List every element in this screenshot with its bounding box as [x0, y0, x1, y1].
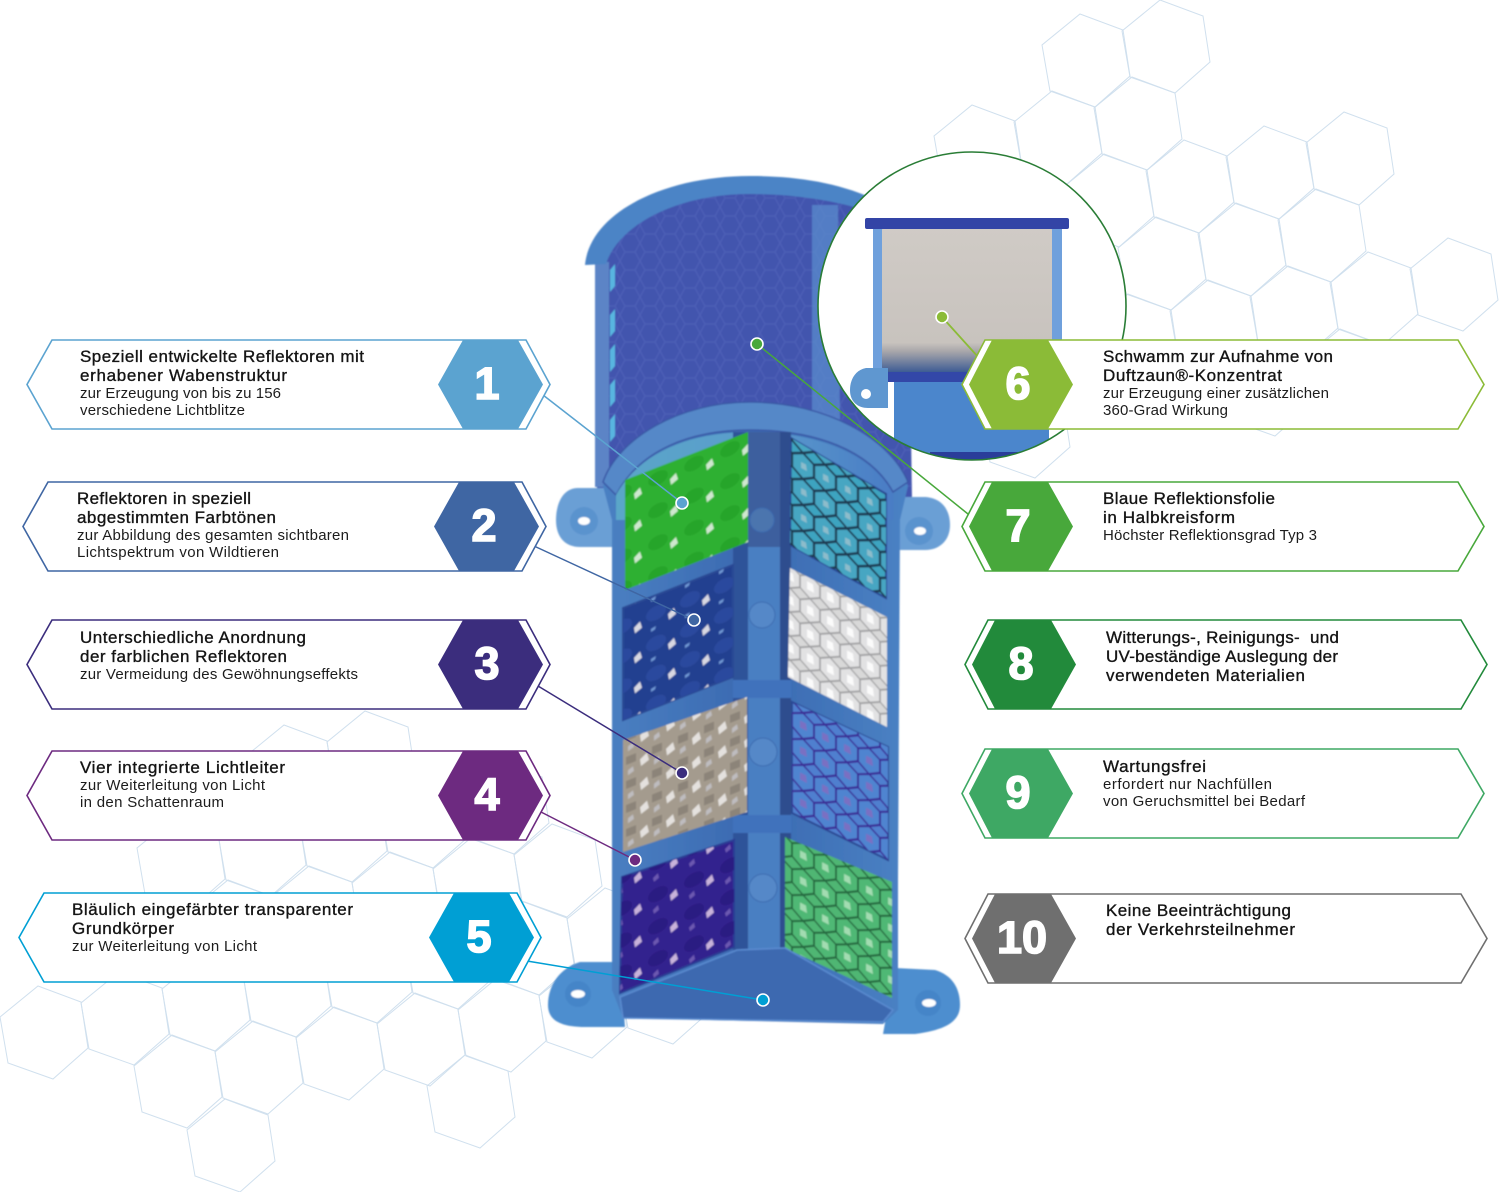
marker dot 5	[757, 994, 769, 1006]
text: erhabener Wabenstruktur	[80, 366, 287, 385]
text: Speziell entwickelte Reflektoren mit	[80, 347, 364, 366]
leader line 7	[757, 344, 968, 514]
text	[1106, 628, 1339, 685]
number: 4	[474, 769, 500, 820]
outline	[965, 894, 1487, 983]
text: Grundkörper	[72, 919, 174, 938]
text: in den Schattenraum	[80, 794, 224, 811]
holder base band	[888, 372, 968, 382]
text: zur Erzeugung von bis zu 156	[80, 385, 281, 402]
text: abgestimmten Farbtönen	[77, 508, 276, 527]
text	[1103, 757, 1306, 810]
outline	[962, 482, 1484, 571]
text: verschiedene Lichtblitze	[80, 402, 245, 419]
callout 4	[27, 751, 550, 840]
badge	[972, 620, 1076, 709]
sponge	[882, 225, 1052, 372]
text: Höchster Reflektionsgrad Typ 3	[1103, 527, 1317, 544]
callout 10	[965, 894, 1487, 983]
badge	[438, 340, 543, 429]
background honeycomb bottom left	[0, 711, 708, 1192]
outline	[27, 751, 550, 840]
number: 10	[997, 912, 1047, 963]
number: 8	[1008, 638, 1034, 689]
text	[1106, 901, 1295, 939]
badge	[434, 482, 539, 571]
inset flange	[850, 368, 888, 408]
callout 2	[23, 482, 546, 571]
outline	[27, 620, 550, 709]
marker dot 2	[688, 614, 700, 626]
reflector violet blue right	[792, 702, 888, 860]
lower mounting flange left	[548, 962, 625, 1027]
marker dot 3	[676, 767, 688, 779]
text	[1103, 489, 1317, 544]
holder body	[873, 226, 1062, 378]
text: Blaue Reflektionsfolie	[1103, 489, 1275, 508]
text: der Verkehrsteilnehmer	[1106, 920, 1295, 939]
badge	[969, 749, 1073, 838]
marker dot 1	[676, 497, 688, 509]
callout 7	[962, 482, 1484, 571]
callout 1	[27, 340, 550, 429]
flange holes upper	[570, 507, 933, 545]
text: zur Abbildung des gesamten sichtbaren	[77, 527, 349, 544]
number: 6	[1005, 358, 1031, 409]
badge	[438, 620, 543, 709]
reflector tan left	[623, 697, 747, 852]
text: zur Weiterleitung von Licht	[72, 938, 258, 955]
leader line 4	[541, 812, 635, 860]
housing dome collar	[603, 402, 908, 495]
central spine	[733, 432, 791, 952]
text: 360-Grad Wirkung	[1103, 402, 1228, 419]
outline	[27, 340, 550, 429]
outline	[23, 482, 546, 571]
text: der farblichen Reflektoren	[80, 647, 287, 666]
text	[80, 758, 285, 811]
leader line 5	[527, 961, 763, 1000]
outline	[19, 893, 541, 982]
outline	[962, 340, 1484, 429]
reflector teal right	[790, 438, 886, 598]
text: Bläulich eingefärbter transparenter	[72, 900, 353, 919]
upper mounting flange left	[556, 488, 613, 547]
reflector silver right	[788, 568, 887, 727]
number: 3	[474, 638, 500, 689]
outline	[965, 620, 1487, 709]
badge	[969, 482, 1073, 571]
holder lower part	[894, 382, 1049, 454]
dome inner	[616, 432, 893, 520]
badge	[969, 340, 1073, 429]
callout 3	[27, 620, 550, 709]
text: UV-beständige Auslegung der	[1106, 647, 1338, 666]
triangular base	[620, 948, 893, 1022]
callout 9	[962, 749, 1484, 838]
reflector green right	[785, 837, 892, 998]
text	[72, 900, 353, 955]
text: Lichtspektrum von Wildtieren	[77, 544, 279, 561]
marker dot 6	[936, 311, 948, 323]
inset bottom strip	[930, 452, 1018, 460]
leader line 1	[543, 395, 682, 503]
leader line 2	[534, 546, 694, 620]
text: Vier integrierte Lichtleiter	[80, 758, 285, 777]
text: zur Erzeugung einer zusätzlichen	[1103, 385, 1329, 402]
text: zur Weiterleitung von Licht	[80, 777, 266, 794]
marker dot 7	[751, 338, 763, 350]
text: zur Vermeidung des Gewöhnungseffekts	[80, 666, 358, 683]
text: Witterungs-, Reinigungs- und	[1106, 628, 1339, 647]
text	[80, 347, 364, 419]
text: Duftzaun®-Konzentrat	[1103, 366, 1282, 385]
marker dot 4	[629, 854, 641, 866]
number: 5	[466, 911, 492, 962]
number: 7	[1005, 500, 1031, 551]
badge	[429, 893, 534, 982]
text: verwendeten Materialien	[1106, 666, 1305, 685]
prism housing	[603, 402, 908, 1024]
lower mounting flange right	[883, 968, 960, 1034]
number: 2	[471, 500, 497, 551]
badge	[972, 894, 1076, 983]
callout 8	[965, 620, 1487, 709]
reflector indigo left	[620, 840, 734, 993]
text: erfordert nur Nachfüllen	[1103, 776, 1272, 793]
text: Keine Beeinträchtigung	[1106, 901, 1291, 920]
inset contents	[850, 218, 1069, 465]
text: in Halbkreisform	[1103, 508, 1235, 527]
inset circle: sponge detail	[818, 152, 1126, 465]
number: 1	[474, 358, 500, 409]
leader line 6	[942, 317, 979, 358]
text: von Geruchsmittel bei Bedarf	[1103, 793, 1306, 810]
text: Schwamm zur Aufnahme von	[1103, 347, 1333, 366]
upper mounting flange right	[894, 497, 950, 550]
text	[1103, 347, 1333, 419]
holder top cap	[865, 218, 1069, 229]
text	[80, 628, 358, 683]
callout 6	[962, 340, 1484, 429]
callout 5	[19, 893, 541, 982]
badge	[438, 751, 543, 840]
flange holes lower	[565, 981, 941, 1016]
background honeycomb top right	[934, 0, 1498, 478]
circle outline	[818, 152, 1126, 460]
text: Reflektoren in speziell	[77, 489, 251, 508]
leader line 3	[538, 686, 682, 773]
product: reflector post	[548, 176, 960, 1034]
text: Unterschiedliche Anordnung	[80, 628, 306, 647]
reflector green left	[625, 432, 748, 590]
number: 9	[1005, 767, 1031, 818]
text: Wartungsfrei	[1103, 757, 1206, 776]
upper cylinder with reflective foil	[585, 176, 912, 500]
text	[77, 489, 349, 561]
outline	[962, 749, 1484, 838]
reflector navy left	[623, 565, 733, 720]
